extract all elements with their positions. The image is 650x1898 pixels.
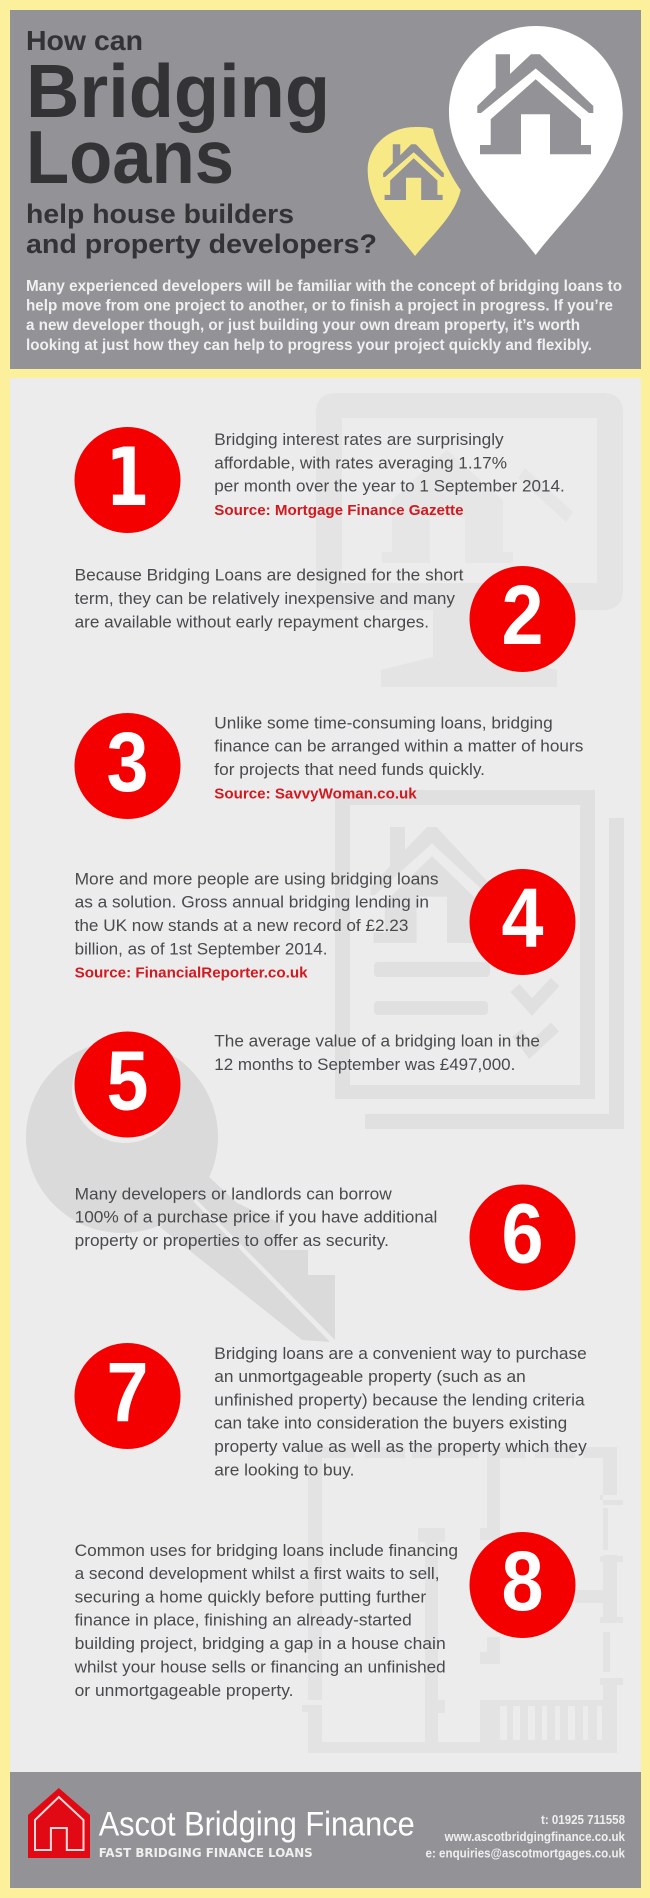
fact 1 text: Source: Mortgage Finance Gazette (214, 502, 464, 519)
fact 8 text: a second development whilst a first waits to sell, (75, 1565, 439, 1583)
fact 6 text: 100% of a purchase price if you have additional (75, 1209, 437, 1227)
intro text: looking at just how they can help to progress your project quickly and flexibly. (26, 337, 592, 354)
fact 8 text: building project, bridging a gap in a house chain (75, 1635, 446, 1653)
fact 8 text: securing a home quickly before putting further (75, 1588, 427, 1606)
fact 4 text: Source: FinancialReporter.co.uk (75, 965, 308, 982)
number badge 4: 4 (502, 871, 544, 965)
fact 8 text (74, 1542, 458, 1700)
fact 7 text: can take into consideration the buyers existing (214, 1415, 567, 1433)
fact 7 text: Bridging loans are a convenient way to purchase (214, 1345, 587, 1363)
fact 3 text: Source: SavvyWoman.co.uk (214, 785, 417, 802)
number badge 2: 2 (502, 568, 544, 662)
background icon: document (335, 790, 624, 1129)
fact 8 text: whilst your house sells or financing an unfinished (74, 1659, 446, 1677)
title: how can: How can (26, 25, 143, 56)
fact 8 text: Common uses for bridging loans include financing (75, 1542, 458, 1560)
fact 5 text (214, 1033, 540, 1074)
fact 7 text (214, 1345, 587, 1480)
fact 4 text (75, 870, 439, 982)
intro text: Many experienced developers will be familiar with the concept of bridging loans to (26, 278, 622, 295)
number badge 4 (470, 869, 576, 975)
background icon: monitor (316, 393, 623, 687)
intro text: help move from one project to another, or to finish a project in progress. If you’re (26, 298, 613, 314)
fact 2 text (75, 567, 464, 631)
number badge 2 (470, 566, 576, 672)
fact 6 text: property or properties to offer as security. (75, 1232, 389, 1250)
icon: white map pin with house (449, 26, 623, 255)
fact 2 (75, 566, 575, 672)
subtitle line 2: and property developers? (26, 229, 377, 259)
fact 3 (74, 713, 583, 819)
intro text (26, 278, 622, 354)
number badge 5: 5 (106, 1034, 148, 1128)
subtitle line 1: help house builders (26, 199, 294, 229)
fact 5 text: The average value of a bridging loan in the (214, 1033, 540, 1051)
number badge 5 (74, 1032, 180, 1138)
fact 4 text: as a solution. Gross annual bridging lending in (75, 894, 429, 912)
fact 6 (75, 1184, 575, 1290)
title: bridging: Bridging (26, 49, 330, 133)
fact 4 text: More and more people are using bridging loans (75, 870, 439, 888)
fact 1 text: per month over the year to 1 September 2014. (214, 478, 565, 496)
logo tagline: FAST BRIDGING FINANCE LOANS (99, 1846, 313, 1860)
fact 8 (74, 1532, 576, 1700)
number badge 1 (74, 427, 180, 533)
icon: yellow map pin with house (368, 127, 461, 256)
fact 3 text: Unlike some time-consuming loans, bridging (214, 714, 553, 732)
fact 7 text: an unmortgageable property (such as an (214, 1368, 526, 1386)
contact details: t: 01925 711558 (541, 1813, 625, 1827)
panel: footer (10, 1772, 641, 1888)
fact 2 text: term, they can be relatively inexpensive and many (75, 590, 456, 608)
fact 2 text: are available without early repayment charges. (75, 613, 429, 631)
panel: header (10, 10, 641, 369)
fact 1 (74, 427, 565, 533)
number badge 8: 8 (502, 1534, 544, 1628)
background icon: key (26, 1037, 335, 1342)
fact 4 text: the UK now stands at a new record of £2.23 (75, 917, 408, 935)
number badge 8 (470, 1532, 576, 1638)
number badge 3: 3 (106, 715, 148, 809)
intro text: a new developer though, or just building your own dream property, it’s worth (26, 317, 580, 334)
fact 2 text: Because Bridging Loans are designed for the short (75, 567, 464, 585)
fact 3 text: finance can be arranged within a matter of hours (214, 738, 583, 756)
fact 8 text: finance in place, finishing an already-started (75, 1612, 412, 1630)
fact 3 text: for projects that need funds quickly. (214, 761, 485, 779)
fact 4 (75, 869, 575, 982)
title: loans: Loans (26, 115, 234, 199)
fact 6 text: Many developers or landlords can borrow (75, 1185, 392, 1203)
fact 5 text: 12 months to September was £497,000. (214, 1056, 515, 1074)
number badge 7: 7 (106, 1345, 148, 1439)
fact 7 (74, 1343, 587, 1480)
panel: numbered facts (10, 378, 641, 1772)
contact details: www.ascotbridgingfinance.co.uk (444, 1830, 625, 1844)
fact 1 text (214, 431, 565, 519)
logo wordmark: Ascot Bridging Finance (99, 1806, 415, 1844)
fact 3 text (214, 714, 583, 802)
icon: red house logo (28, 1788, 90, 1858)
number badge 6 (470, 1184, 576, 1290)
contact details: e: enquiries@ascotmortgages.co.uk (426, 1847, 625, 1861)
fact 7 text: unfinished property) because the lending criteria (214, 1391, 585, 1409)
fact 7 text: property value as well as the property which they (214, 1438, 587, 1456)
fact 5 (74, 1032, 540, 1138)
number badge 3 (74, 713, 180, 819)
fact 6 text (75, 1185, 437, 1250)
background icon: floor plan (302, 1447, 623, 1753)
number badge 6: 6 (502, 1186, 544, 1280)
fact 7 text: are looking to buy. (214, 1462, 354, 1480)
fact 1 text: Bridging interest rates are surprisingly (214, 431, 504, 449)
number badge 7 (74, 1343, 180, 1449)
contact details (426, 1813, 625, 1861)
fact 8 text: or unmortgageable property. (75, 1682, 293, 1700)
number badge 1: 1 (106, 431, 150, 524)
fact 1 text: affordable, with rates averaging 1.17% (214, 454, 507, 472)
fact 4 text: billion, as of 1st September 2014. (75, 940, 327, 958)
